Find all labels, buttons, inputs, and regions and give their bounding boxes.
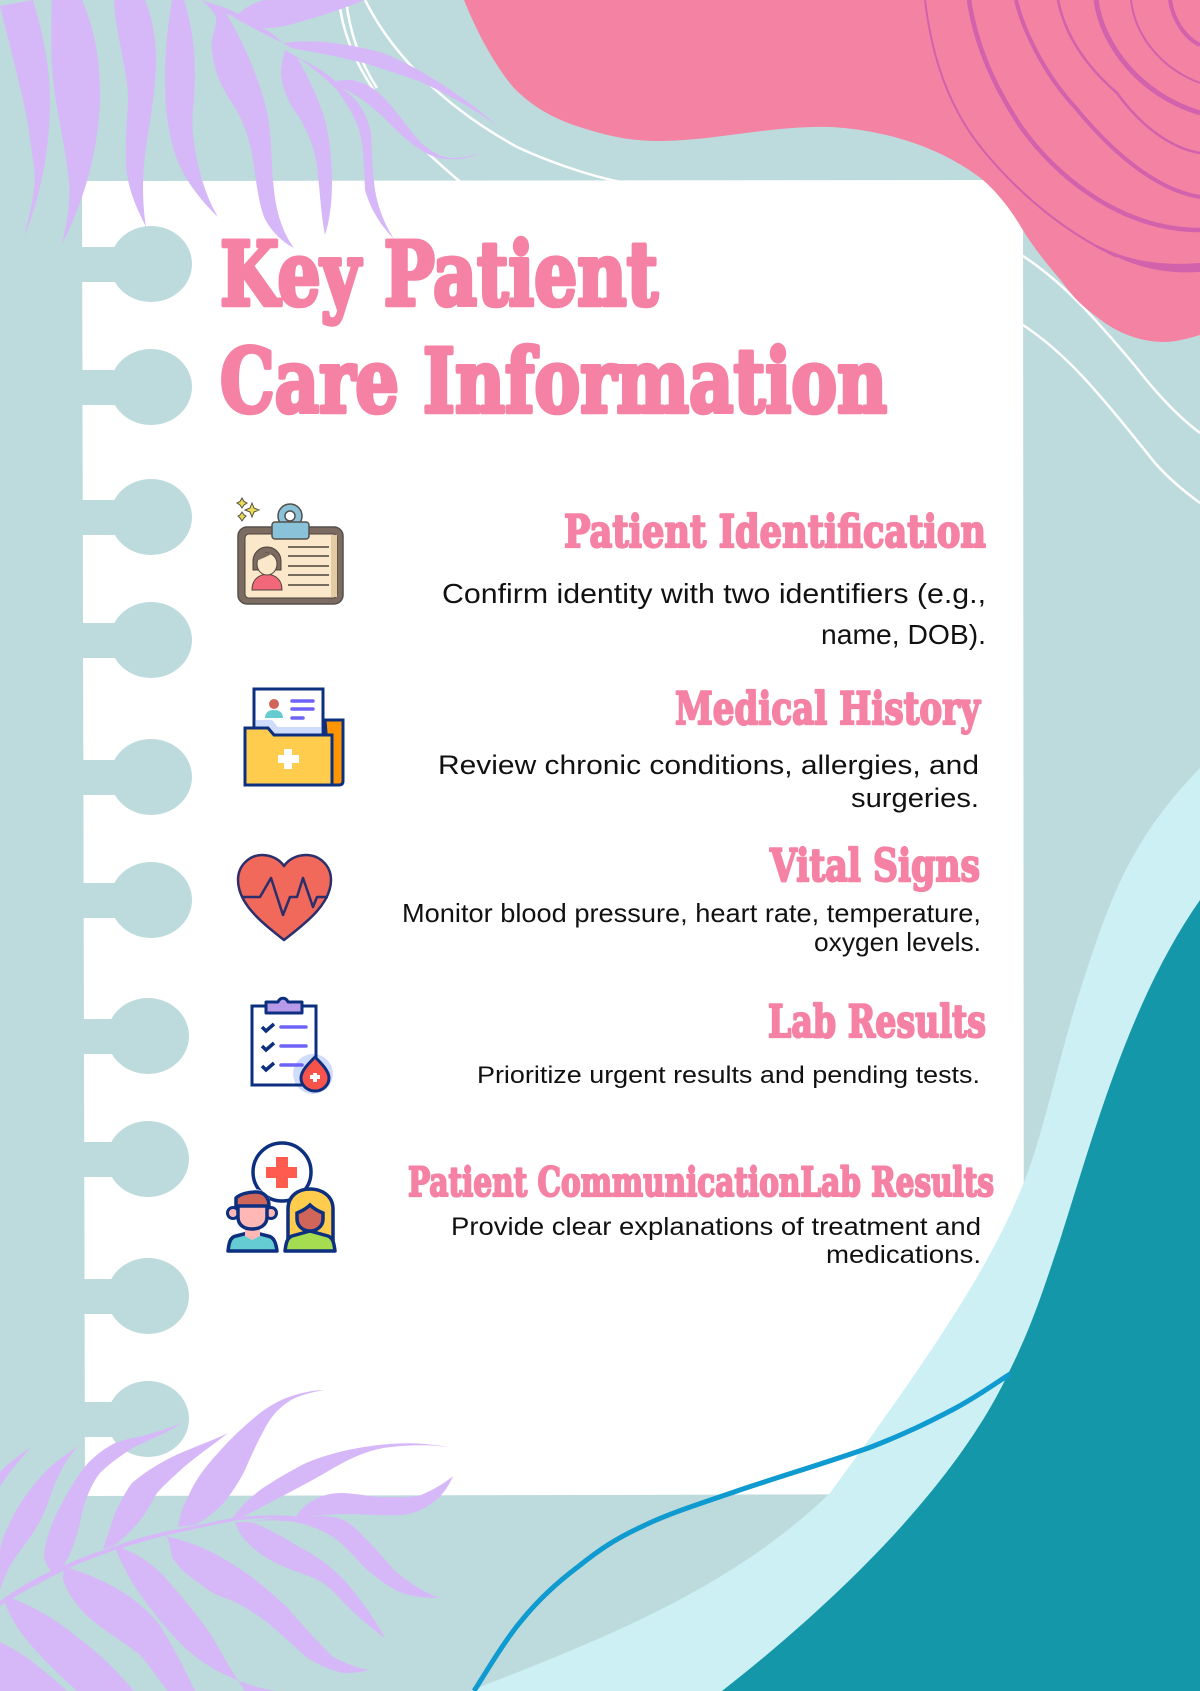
text: Medical History description: Review chronic conditions, allergies, and — [438, 750, 979, 780]
text: Patient Identification description: name, DOB). — [821, 619, 986, 650]
text: Patient Identification description: Confirm identity with two identifiers (e.g., — [442, 578, 986, 609]
text: Vital Signs description — [402, 898, 981, 957]
icon: lab clipboard with blood drop — [252, 998, 333, 1094]
top-left palm leaves — [0, 0, 496, 248]
panel: notebook paper — [80, 180, 1024, 1496]
title: Key Patient — [220, 222, 658, 326]
heading: Vital Signs: Vital Signs — [769, 839, 980, 892]
heading: Medical History: Medical History — [675, 682, 981, 735]
text: Lab Results description: Prioritize urgent results and pending tests. — [477, 1062, 980, 1089]
title: Care Information — [220, 329, 887, 433]
title — [220, 222, 887, 433]
text: Medical History description — [438, 750, 979, 813]
notebook ring knobs — [80, 226, 192, 1457]
text: Patient Communication description: Provide clear explanations of treatment and — [451, 1213, 981, 1241]
icon: medical folder — [245, 689, 343, 785]
heading: Patient Identification: Patient Identification — [564, 505, 986, 558]
text: Patient Communication description: medications. — [826, 1241, 981, 1269]
blue curved line — [474, 1374, 1010, 1691]
pink blob with swirl lines — [464, 0, 1200, 342]
text: Patient Identification description — [442, 578, 986, 650]
icon: patient ID badge — [237, 498, 343, 604]
heading: Patient CommunicationLab Results: Patient CommunicationLab Results — [408, 1159, 994, 1206]
text: Medical History description: surgeries. — [851, 783, 979, 813]
icon: patients with medical cross — [228, 1143, 335, 1251]
heading: Lab Results: Lab Results — [768, 995, 986, 1048]
curved teal wave — [722, 900, 1200, 1691]
text: Vital Signs description: Monitor blood pressure, heart rate, temperature, — [402, 898, 981, 928]
text: Vital Signs description: oxygen levels. — [814, 927, 981, 957]
curved cyan wave — [470, 768, 1200, 1691]
icon: heart with pulse — [238, 855, 331, 940]
bottom-left palm leaves — [0, 1390, 453, 1691]
text: Patient Communication description — [451, 1213, 981, 1269]
